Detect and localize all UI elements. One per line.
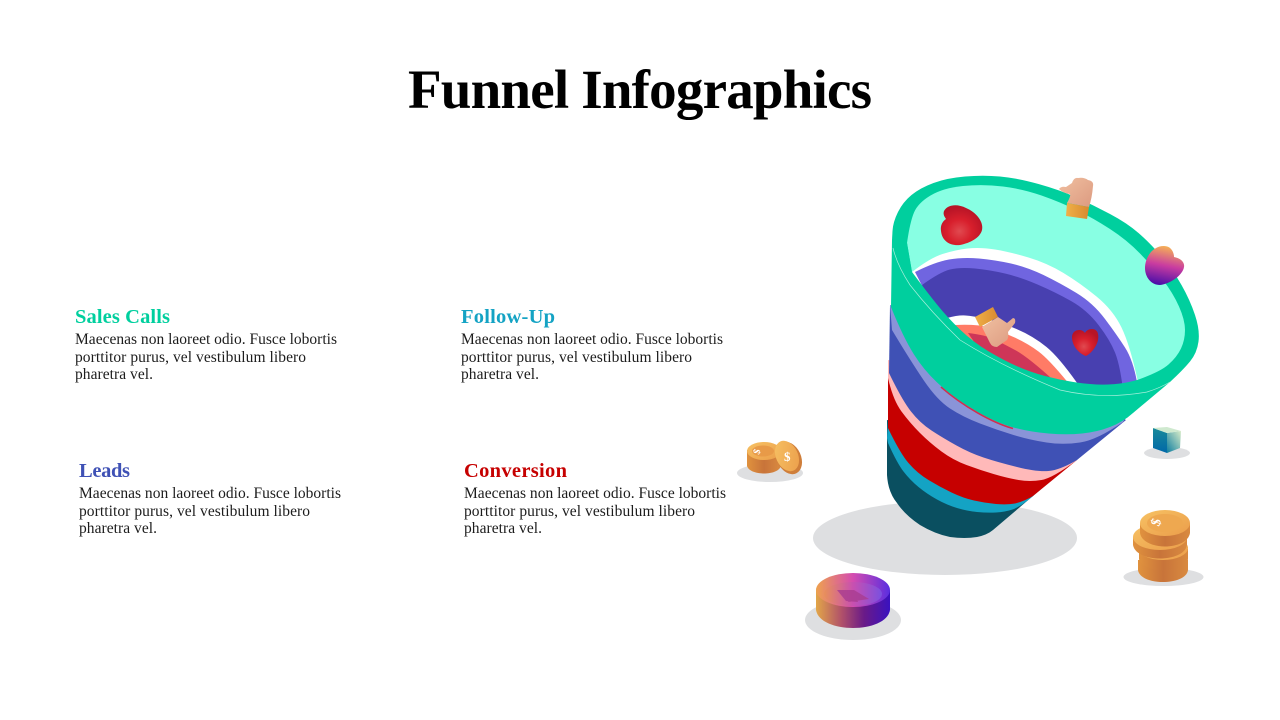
funnel interior: white inner gap	[947, 315, 1082, 390]
funnel interior: crimson core	[968, 333, 1064, 390]
funnel interior: violet ring	[915, 258, 1137, 395]
text block: Sales Calls: pharetra vel.	[75, 366, 153, 383]
text block: Sales Calls: Maecenas non laoreet odio. Fusce lobortis	[75, 331, 337, 348]
icon: coin stack right	[1124, 510, 1204, 586]
text block: Conversion: Conversion	[464, 460, 568, 482]
icon: gradient coin	[805, 573, 901, 640]
text block: Follow-Up: pharetra vel.	[461, 366, 539, 383]
text block: Sales Calls: porttitor purus, vel vestibulum libero	[75, 349, 306, 366]
funnel interior: coral ring	[955, 325, 1074, 390]
funnel	[887, 176, 1199, 538]
funnel interior: white gap	[912, 248, 1138, 395]
icon: coin stack right: $	[1149, 517, 1165, 528]
text block: Conversion: Maecenas non laoreet odio. Fusce lobortis	[464, 485, 726, 502]
funnel seam: red line	[941, 387, 1013, 428]
funnel layer: dark teal base	[887, 420, 1040, 538]
funnel interior: dark violet wall	[922, 268, 1123, 395]
funnel layer: periwinkle band	[890, 305, 1135, 444]
text block: Leads: Leads	[79, 460, 130, 482]
text block: Sales Calls: Sales Calls	[75, 306, 170, 328]
text block: Follow-Up	[461, 306, 723, 383]
funnel shadow	[813, 501, 1077, 575]
text block: Sales Calls	[75, 306, 337, 383]
text block: Conversion: pharetra vel.	[464, 520, 542, 537]
icon: coins left	[737, 437, 807, 482]
icon: hand top	[1059, 178, 1093, 219]
icon: coins left: $	[784, 449, 791, 464]
funnel layer: back rim	[892, 176, 1199, 400]
text block: Follow-Up: Maecenas non laoreet odio. Fusce lobortis	[461, 331, 723, 348]
title: Funnel Infographics	[408, 59, 872, 120]
icon: cube	[1144, 427, 1190, 459]
text block: Conversion	[464, 460, 726, 537]
funnel front lip highlight	[893, 248, 1170, 396]
icon: gradient heart	[1145, 246, 1184, 285]
funnel layer: pink band	[888, 360, 1090, 481]
text block: Follow-Up: porttitor purus, vel vestibulum libero	[461, 349, 692, 366]
icon: red heart large	[941, 205, 982, 245]
funnel layer: blue band	[889, 305, 1126, 471]
funnel layer: teal band	[887, 420, 1060, 513]
icon: coins left: $	[751, 448, 764, 456]
icon: hand lower	[975, 307, 1015, 347]
icon: red heart small	[1072, 329, 1098, 356]
text block: Conversion: porttitor purus, vel vestibulum libero	[464, 503, 695, 520]
text block: Leads	[79, 460, 341, 537]
funnel layer: red band	[888, 365, 1077, 504]
funnel interior: aqua wall	[907, 185, 1185, 385]
text block: Follow-Up: Follow-Up	[461, 306, 555, 328]
text block: Leads: Maecenas non laoreet odio. Fusce lobortis	[79, 485, 341, 502]
text block: Leads: porttitor purus, vel vestibulum libero	[79, 503, 310, 520]
funnel layer: green front lip	[891, 240, 1170, 434]
text block: Leads: pharetra vel.	[79, 520, 157, 537]
